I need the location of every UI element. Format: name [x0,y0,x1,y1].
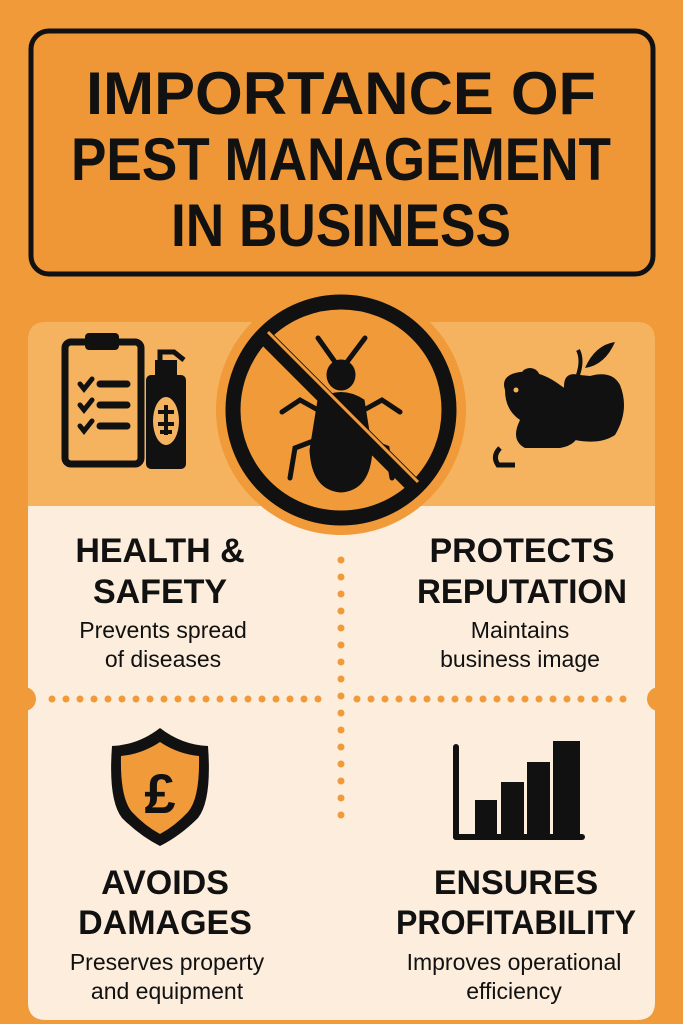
text block: ensures profitability: Improves operational [407,949,621,975]
text block: health & safety: of diseases [105,646,221,672]
text block: health & safety: SAFETY [93,573,227,611]
text block: avoids damages: and equipment [91,978,244,1004]
icon: mouse and apple [495,342,624,465]
icon: bar chart [453,741,585,840]
icon: pound shield: £ [144,762,176,825]
text block: health & safety: HEALTH & [75,532,245,570]
text block: avoids damages: AVOIDS [101,864,229,902]
text block: protects reputation: REPUTATION [417,573,627,611]
text block: ensures profitability: ENSURES [434,864,598,902]
title: IN BUSINESS [171,192,511,259]
title: IMPORTANCE OF [86,60,596,127]
text block: health & safety [75,532,247,672]
icon: no bugs sign [216,285,466,535]
text block: protects reputation [417,532,627,672]
text block: protects reputation: PROTECTS [429,532,615,570]
text block: avoids damages: Preserves property [70,949,265,975]
text block: avoids damages [70,864,265,1004]
panel: main card [12,322,671,1020]
title [31,31,653,274]
text block: protects reputation: Maintains [471,617,569,643]
text block: ensures profitability: efficiency [466,978,562,1004]
icon: pound shield [111,728,209,846]
text block: protects reputation: business image [440,646,600,672]
text block: avoids damages: DAMAGES [78,904,252,942]
text block: health & safety: Prevents spread [79,617,247,643]
icon: clipboard and spray [65,333,186,469]
title: PEST MANAGEMENT [71,126,611,193]
text block: ensures profitability: PROFITABILITY [396,904,636,942]
text block: ensures profitability [396,864,636,1004]
